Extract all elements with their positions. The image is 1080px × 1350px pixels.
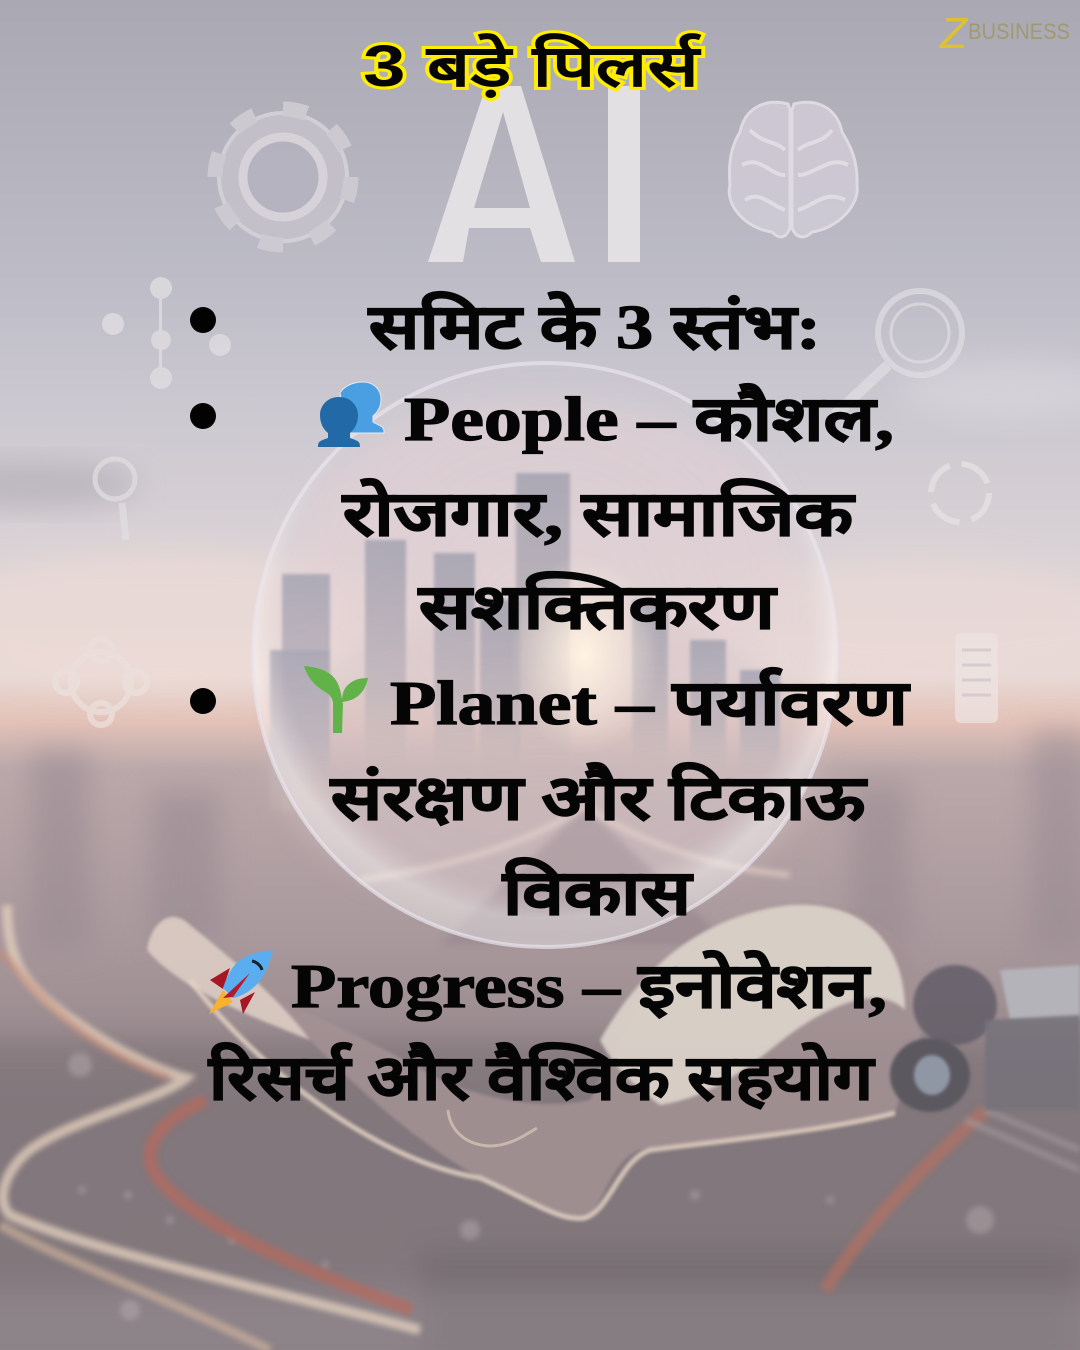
light trails [0, 905, 1080, 1350]
text block: summit pillars [208, 291, 911, 1113]
glass sphere with city [253, 363, 837, 947]
logo: Z Business: BUSINESS [968, 19, 1070, 44]
text block: summit pillars: संरक्षण और टिकाऊ [330, 762, 868, 833]
logo: Z Business: Z [939, 9, 969, 58]
title: 3 बड़े पिलर्स [363, 33, 702, 99]
arrows circle icon right [931, 464, 989, 522]
bullet list markers [190, 307, 216, 714]
blurred far skyline [30, 730, 1080, 950]
lower dark city [0, 1040, 1080, 1350]
logo: Z Business [939, 9, 1070, 58]
brain icon [729, 102, 857, 237]
text block: summit pillars: Planet – पर्यावरण [390, 667, 911, 738]
clouds [0, 461, 140, 509]
city speckles [68, 1053, 994, 1320]
big AI letters [428, 86, 640, 262]
gear icon [215, 109, 351, 245]
icon: sprout [304, 666, 368, 733]
text block: summit pillars: सशक्तिकरण [418, 571, 778, 642]
robotic hand [147, 903, 1080, 1218]
magnifier icon right [835, 291, 962, 415]
text block: summit pillars: रोजगार, सामाजिक [342, 478, 856, 549]
icon: people [318, 382, 384, 447]
text block: summit pillars: विकास [502, 857, 694, 928]
icon: rocket [209, 950, 273, 1014]
server icon right [955, 633, 998, 723]
magnifier icon left [95, 459, 135, 540]
text block: summit pillars: People – कौशल, [404, 383, 894, 454]
text block: summit pillars: समिट के 3 स्तंभ: [368, 291, 821, 362]
text block: summit pillars: Progress – इनोवेशन, [291, 950, 887, 1021]
network icon left [102, 277, 231, 389]
ring network icon left [55, 639, 147, 725]
text block: summit pillars: रिसर्च और वैश्विक सहयोग [208, 1042, 875, 1113]
